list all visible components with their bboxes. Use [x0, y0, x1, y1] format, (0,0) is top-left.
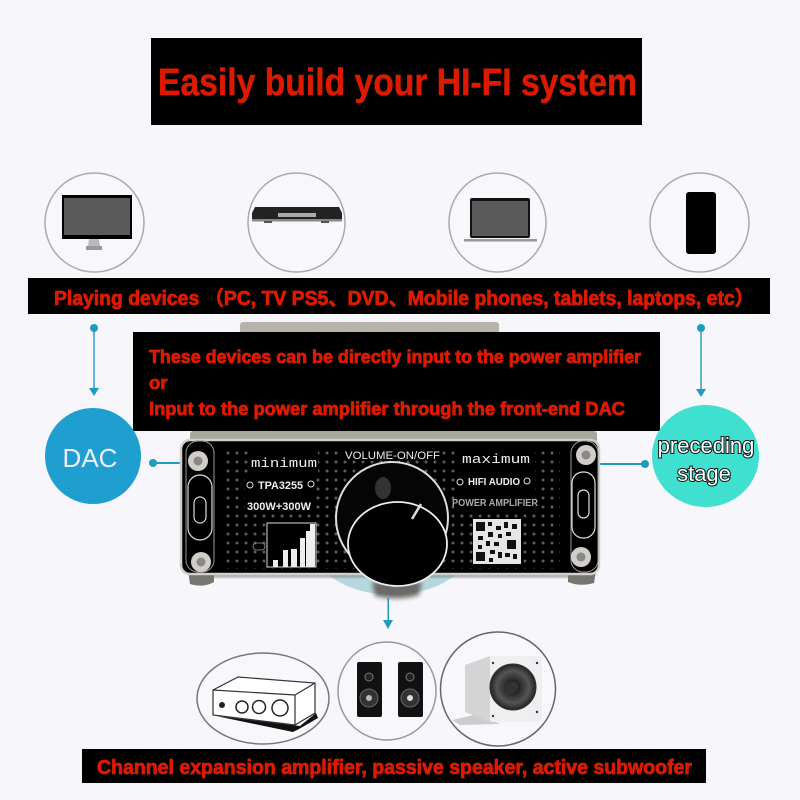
QR code — [473, 519, 521, 564]
node: preceding stage: preceding — [658, 433, 754, 458]
amplifier shadow and feet — [327, 574, 457, 595]
left and right end plates — [186, 441, 214, 572]
node: DAC: DAC — [63, 443, 117, 473]
amplifier — [181, 431, 599, 598]
banner: output devices — [82, 749, 706, 783]
icon: passive speakers — [338, 642, 436, 740]
icon: channel expansion amplifier — [197, 653, 329, 744]
power bar graphic — [267, 523, 316, 567]
arrow: devices to preceding stage — [696, 324, 706, 397]
node: preceding stage — [652, 405, 759, 507]
amplifier: VOLUME-ON/OFF — [345, 450, 440, 462]
callout: input note: These devices can be directly input to the power amplifier — [149, 346, 641, 367]
amplifier: HIFI AUDIO — [468, 477, 520, 488]
icon: DVD player — [248, 173, 345, 272]
callout: input note: or — [149, 372, 168, 393]
title banner: Easily build your HI-FI system — [158, 62, 637, 104]
connector: DAC to amplifier — [149, 459, 183, 467]
node: DAC — [45, 408, 141, 504]
amplifier: TPA3255 — [258, 480, 303, 492]
icon: mobile phone — [650, 173, 749, 272]
banner: output devices: Channel expansion amplifier, passive speaker, active subwoofer — [97, 757, 692, 779]
callout: input note: Input to the power amplifier through the front-end DAC — [149, 398, 625, 419]
icon: monitor — [45, 173, 144, 272]
panel labels: minimum — [251, 456, 317, 471]
icon: active subwoofer — [440, 632, 556, 746]
arrow: amplifier to outputs — [383, 598, 393, 629]
banner: playing devices — [28, 278, 770, 314]
icon: laptop — [449, 173, 546, 272]
title banner — [151, 38, 642, 125]
node: preceding stage: stage — [677, 461, 731, 486]
connector: preceding stage to amplifier — [598, 460, 649, 468]
amplifier top rim — [190, 431, 597, 443]
amplifier top edge behind the note — [240, 322, 499, 334]
volume knob — [336, 462, 448, 574]
amplifier: POWER AMPLIFIER — [452, 498, 539, 509]
banner: playing devices: Playing devices （PC, TV PS5、DVD、Mobile phones, tablets, laptops, etc） — [54, 287, 754, 310]
amplifier front panel — [181, 440, 599, 574]
screws — [188, 451, 208, 471]
arrow: devices to DAC — [89, 324, 99, 396]
callout: input note — [133, 332, 660, 431]
amplifier: 300W+300W — [247, 501, 312, 513]
amplifier: maximum — [462, 452, 530, 467]
